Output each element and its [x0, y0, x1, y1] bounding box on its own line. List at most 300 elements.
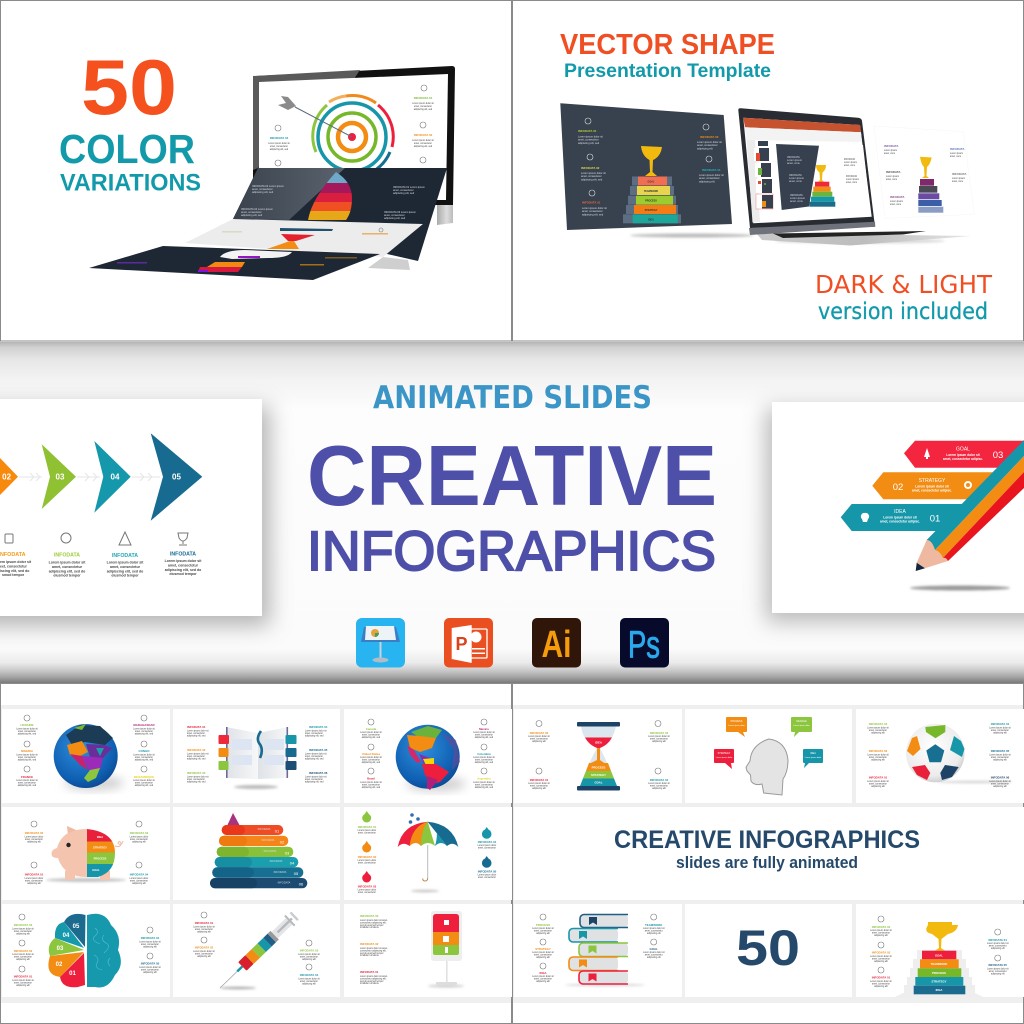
text blocks: INFODATA 02 [195, 946, 214, 950]
light trophy slide: Lorem ipsum [890, 201, 903, 203]
dark slide with teardrop: INFODATA 01 Lorem ipsum [393, 186, 425, 189]
laptop mockup: Lorem ipsum [846, 178, 859, 181]
laptop mockup: INFODATA [790, 194, 803, 197]
text blocks: Lorem ipsum dolor sit [987, 968, 1009, 970]
info column 04: INFODATA [112, 553, 138, 559]
info column 02: smod tempor [2, 573, 25, 577]
laptop base [756, 233, 971, 246]
central band background [0, 342, 1024, 683]
text blocks: adipiscing elit [647, 932, 661, 935]
text blocks: Lorem ipsum dolor sit amet, [360, 976, 388, 978]
card: open book [173, 709, 340, 803]
laptop mockup: INFODATA [787, 156, 800, 159]
dark slide with teardrop: adipiscing elit, sed [393, 191, 415, 195]
card: syringe [173, 904, 340, 997]
ring rows [210, 825, 307, 888]
text blocks: amet, consectetur [475, 733, 493, 736]
card: america globe [344, 709, 512, 803]
info column 03: eiusmod tempor [53, 574, 81, 578]
text blocks: United States [362, 752, 381, 756]
light trophy slide [874, 126, 974, 218]
text blocks: INFODATA 01 [14, 974, 33, 978]
text blocks: INFODATA 04 [309, 725, 328, 729]
dark slide text: Lorem ipsum dolor sit [581, 172, 606, 175]
text blocks: adipiscing elit [652, 740, 666, 743]
info column 02: NFODATA [0, 552, 26, 558]
idea arrow: 01 [930, 514, 940, 524]
hourglass [577, 722, 620, 790]
colored steps: PROCESS [932, 971, 946, 975]
text blocks: Lorem ipsum dolor sit [648, 735, 670, 738]
text blocks: Lorem ipsum dolor sit [989, 754, 1011, 756]
text blocks: INFODATA 03 [650, 731, 669, 735]
text blocks: adipiscing elit [993, 731, 1007, 734]
text blocks: amet, consectetur [130, 838, 148, 841]
text blocks: adipiscing elit [143, 945, 157, 948]
text blocks: Mexico [479, 727, 489, 731]
light trophy slide: amet, cons [950, 155, 962, 158]
drops with text: amet, consectetur [358, 861, 376, 864]
dark slide with teardrop: amet, consectetur [384, 213, 405, 217]
text blocks: amet, consectetur [187, 778, 205, 781]
strategy arrow: STRATEGY [919, 478, 946, 484]
drops with text: INFODATA 03 [358, 884, 377, 888]
small steps [809, 182, 835, 207]
text blocks: INFODATA 03 [869, 722, 888, 726]
tabs [218, 735, 296, 770]
steps [623, 176, 681, 223]
light trophy slide: Lorem ipsum [952, 178, 965, 180]
chevron arrows: 05 [172, 472, 181, 482]
drops with text: INFODATA 02 [358, 855, 377, 859]
text blocks: adipiscing elit [993, 758, 1007, 761]
drops with text: INFODATA 01 [358, 825, 377, 829]
light trophy slide: amet, cons [890, 203, 902, 206]
text blocks: amet, consectetur [989, 970, 1007, 973]
pig [52, 826, 123, 880]
text blocks: amet, consectetur [872, 957, 890, 960]
card: hourglass [514, 709, 682, 803]
ring rows: INFODATA [262, 838, 275, 842]
panel: left arrows slide [0, 399, 270, 626]
text blocks: Lorem ipsum dolor sit [360, 731, 382, 734]
text blocks [870, 916, 1009, 988]
left brain segments: 04 [63, 933, 70, 939]
icon: powerpoint: P [455, 634, 468, 654]
goal arrow: GOAL [956, 446, 970, 452]
goal arrow: 03 [993, 450, 1003, 461]
text blocks: INFODATA 04 [650, 778, 669, 782]
text blocks: amet, consectetur [650, 784, 668, 787]
text blocks: INFODATA 04 [300, 973, 319, 977]
text blocks: amet, consectetur [530, 784, 548, 787]
steps: GOAL [648, 180, 655, 184]
pig: GOAL [92, 868, 100, 872]
text blocks: Lorem ipsum dolor sit [187, 776, 209, 778]
light trophy slide: INFODATA [890, 195, 905, 199]
text blocks: amet, consectetur [305, 732, 323, 735]
text blocks: Lorem ipsum dolor sit [16, 728, 38, 730]
text blocks: amet, consectetur [991, 782, 1009, 785]
text blocks: Lorem ipsum dolor sit [193, 950, 215, 953]
text blocks: adipiscing elit, sed [187, 734, 206, 737]
left brain segments: 01 [69, 971, 76, 977]
text blocks: incididunt ut labore [360, 982, 380, 985]
goal arrow: amet, consectetur adipisc. [943, 457, 983, 461]
light trophy slide: Lorem ipsum [950, 153, 963, 155]
text blocks: INFODATA 02 [530, 731, 549, 735]
text blocks: adipiscing elit [993, 785, 1007, 788]
text blocks [360, 914, 388, 985]
drops with text: INFODATA 04 [478, 840, 497, 844]
icon: photoshop: Ps [628, 624, 660, 666]
laptop mockup: INFODATA [789, 174, 802, 177]
text blocks: adipiscing elit [197, 930, 211, 933]
card: road sign [344, 904, 512, 997]
shadow under slides [630, 234, 754, 238]
laptop mockup: Lorem ipsum [787, 158, 802, 162]
text blocks: amet, consectetur [18, 730, 36, 733]
text blocks: adipiscing elit, sed [18, 732, 37, 735]
card: book stack [514, 904, 682, 997]
text blocks: Lorem ipsum dolor sit [16, 779, 38, 782]
colored steps: STRATEGY [931, 980, 947, 984]
text blocks: amet, consectetur [991, 756, 1009, 759]
text blocks: Canada [366, 727, 377, 731]
text blocks: Lorem ipsum dolor sit [989, 726, 1011, 730]
text blocks: INFODATA 04 [988, 938, 1007, 942]
dark slide on laptop [776, 144, 819, 210]
card: brain [2, 904, 170, 997]
dark slide with teardrop: adipiscing elit, sed [241, 213, 263, 217]
text blocks: adipiscing elit, sed [475, 786, 494, 789]
text blocks: INFODATA 03 [187, 771, 206, 775]
text blocks: amet, consectetur [475, 758, 493, 761]
text blocks [25, 821, 149, 885]
text blocks [12, 914, 161, 987]
pig: STRATEGY [93, 846, 107, 850]
text blocks: MOZAMBIQUE [134, 775, 154, 779]
text blocks: Lorem ipsum dolor sit [360, 781, 382, 784]
text blocks: consectetur adipiscing elit, [360, 921, 387, 924]
monitor text blocks: INFODATA 02 [414, 133, 433, 137]
text blocks: Lorem ipsum dolor sit [473, 731, 495, 734]
text blocks: adipiscing elit, sed [362, 786, 381, 789]
pig: IDEA [97, 835, 103, 839]
text blocks [187, 725, 328, 783]
text blocks: sed do eiusmod tempor [360, 952, 384, 955]
text blocks: Lorem ipsum dolor sit [12, 979, 34, 982]
text blocks: INFODATA 04 [141, 936, 160, 940]
strategy arrow: 02 [893, 482, 903, 493]
text blocks: amet, consectetur [869, 782, 887, 785]
text blocks: adipiscing elit, sed [135, 758, 154, 761]
text blocks: amet, consectetur [650, 737, 668, 740]
text blocks: STRATEGY [535, 947, 551, 951]
chevron arrows: 04 [111, 472, 120, 482]
ring rows: INFODATA [274, 870, 287, 874]
text blocks: INFODATA 06 [309, 771, 328, 775]
drops with text: Lorem ipsum dolor [358, 829, 377, 832]
text blocks: Lorem ipsum dolor sit [193, 926, 215, 928]
text blocks: amet, consectetur [989, 944, 1007, 947]
dark slide with teardrop: amet, consectetur [393, 188, 414, 192]
chevron arrows [0, 433, 202, 521]
ring rows: 02 [280, 840, 285, 844]
light trophy slide: amet, cons [886, 178, 898, 181]
text blocks: amet, consectetur [530, 737, 548, 740]
monitor text blocks [268, 85, 434, 166]
text blocks: amet, consectetur [362, 758, 380, 761]
info column 03: amet, consectetur [52, 565, 83, 569]
text blocks: INFODATA 01 [187, 725, 206, 729]
laptop mockup: Lorem ipsum [844, 161, 857, 164]
info column 05: eiusmod tempor [169, 572, 197, 576]
panel: right pencil slide [766, 402, 1024, 622]
text blocks: Lorem ipsum dolor [130, 836, 149, 838]
text blocks: INFODATA 03 [872, 925, 891, 929]
light stairs [893, 950, 985, 998]
syringe body [215, 910, 300, 993]
idea arrow [841, 504, 964, 531]
text blocks: amet, consectetur [195, 952, 213, 955]
text blocks: Lorem ipsum dolor sit [305, 730, 327, 732]
head silhouette [746, 739, 788, 795]
info column 04: amet, consectetur [110, 565, 141, 569]
text blocks: Lorem ipsum dolor sit [989, 780, 1011, 783]
text blocks: amet, consectetur [25, 879, 43, 882]
speech bubbles: IDEA [810, 752, 816, 755]
text blocks: amet, consectetur [14, 955, 32, 958]
text blocks: Lorem ipsum dolor [25, 877, 44, 880]
laptop mockup: INFODATA [846, 176, 857, 178]
text blocks: adipiscing elit [991, 947, 1005, 950]
card: soccer ball [856, 709, 1024, 803]
heading: variations: VARIATIONS [60, 170, 201, 196]
text blocks: Lorem ipsum dolor sit [643, 951, 665, 954]
text blocks: Lorem ipsum dolor sit [133, 754, 155, 756]
text blocks: amet, consectetur [872, 982, 890, 985]
drops with text: amet, consectetur [478, 876, 496, 879]
text blocks: amet, consectetur [25, 838, 43, 841]
text blocks: adipiscing elit [874, 985, 888, 988]
text blocks: INFODATA 02 [14, 949, 33, 953]
text blocks: adipiscing elit [536, 980, 550, 983]
dark slide text: amet, consectetur [697, 143, 718, 147]
text blocks: Lorem ipsum dolor sit [870, 980, 892, 983]
left brain segments: 02 [56, 962, 63, 968]
target chart on monitor [313, 96, 393, 172]
dark slide text: amet, consectetur [578, 138, 599, 142]
dark slide text: Lorem ipsum dolor sit [697, 141, 722, 144]
text blocks: Lorem ipsum dolor sit [139, 940, 161, 944]
icon: keynote [356, 618, 405, 668]
text blocks [532, 914, 665, 983]
text blocks: amet, consectetur [475, 783, 493, 786]
text blocks: Lorem ipsum dolor sit [528, 782, 550, 785]
dark slide with teardrop: INFODATA 04 Lorem ipsum [241, 208, 273, 211]
text blocks: adipiscing elit, sed [18, 758, 37, 761]
text blocks: Lorem ipsum dolor sit [532, 951, 554, 954]
text blocks: Lorem ipsum dolor sit [532, 927, 554, 930]
text blocks: Lorem ipsum dolor sit [16, 754, 38, 756]
text blocks: adipiscing elit [991, 972, 1005, 975]
text blocks: Lorem ipsum dolor sit [870, 955, 892, 958]
colored steps: TEAMWORK [931, 962, 947, 966]
idea arrow: amet, consectetur adipisc. [880, 519, 920, 523]
goal arrow: Lorem ipsum dolor sit [946, 453, 981, 457]
ball [906, 724, 965, 782]
monitor text blocks: Lorem ipsum dolor sit [412, 139, 434, 142]
hourglass: PROCESS [592, 766, 605, 770]
text blocks: INFODATA 03 [360, 914, 379, 918]
subtitle: animated slides: ANIMATED SLIDES [373, 380, 652, 416]
text blocks: Lorem ipsum dolor sit [528, 735, 550, 738]
ring rows: 01 [275, 828, 280, 834]
slide thumbnails [754, 141, 773, 209]
light trophy slide: Lorem ipsum [886, 176, 899, 178]
text blocks: Lorem ipsum dolor sit [870, 929, 892, 932]
text blocks: UKRAINE [20, 723, 34, 727]
text blocks: Lorem ipsum dolor sit amet, [360, 948, 388, 950]
ring rows: 03 [285, 850, 290, 856]
light trophy slide: INFODATA [886, 170, 901, 174]
strategy arrow: amet, consectetur adipisc. [912, 488, 952, 492]
text blocks: adipiscing elit, sed [305, 757, 324, 760]
strategy arrow: Lorem ipsum dolor sit [915, 484, 950, 488]
text blocks: Lorem ipsum dolor sit [473, 781, 495, 784]
text blocks: amet, consectetur [141, 943, 159, 946]
subheading: version included: version included [818, 299, 988, 325]
text blocks: adipiscing elit [532, 787, 546, 790]
sign [431, 911, 462, 985]
ring rows: INFODATA [258, 827, 271, 831]
strategy arrow [872, 472, 994, 499]
title: infographics: INFOGRAPHICS [307, 519, 716, 582]
text blocks: consectetur adipiscing elit, [360, 977, 387, 980]
globe [54, 724, 118, 788]
dark slide text: adipiscing elit, sed [581, 177, 603, 181]
monitor text blocks: Lorem ipsum dolor sit [412, 102, 434, 105]
text blocks: amet, consectetur [135, 756, 153, 759]
laptop mockup: Lorem ipsum [789, 176, 804, 180]
text blocks: adipiscing elit [647, 956, 661, 959]
text blocks: amet, consectetur [300, 955, 318, 958]
light trophy slide: amet, cons [952, 180, 964, 183]
laptop mockup: amet, cons [790, 199, 803, 203]
card: stacked rings pyramid [173, 807, 340, 900]
icon: photoshop [620, 618, 669, 668]
ring rows: INFODATA [278, 880, 291, 884]
icon: illustrator: Ai [542, 624, 572, 666]
text blocks: INFODATA 05 [988, 963, 1007, 967]
card: number 50: 50 [736, 920, 800, 976]
text blocks: amet, consectetur [300, 980, 318, 983]
monitor text blocks: adipiscing elit, sed [414, 108, 433, 111]
left brain segments [48, 914, 86, 987]
dark slide with teardrop: INFODATA 03 Lorem ipsum [384, 211, 416, 214]
text blocks: Lorem ipsum dolor sit [12, 953, 34, 956]
text blocks: PROCESS [536, 923, 550, 927]
text blocks: adipiscing elit, sed [475, 761, 494, 764]
dark slide text: Lorem ipsum dolor sit [699, 174, 724, 177]
dark slide with teardrop: amet, consectetur [252, 187, 273, 191]
card: umbrella [344, 807, 512, 900]
text blocks: amet, consectetur [14, 981, 32, 984]
text blocks: adipiscing elit, sed [362, 761, 381, 764]
steps: TEAMWORK [644, 190, 658, 193]
text blocks: adipiscing elit, sed [187, 757, 206, 760]
text blocks: adipiscing elit [532, 740, 546, 743]
text blocks: amet, consectetur [195, 928, 213, 931]
text blocks: amet, consectetur [645, 929, 663, 932]
chevron arrows: 03 [56, 472, 65, 482]
globe [396, 725, 460, 790]
left brain segments: 05 [73, 924, 80, 930]
dark slide with teardrop: INFODATA 02 Lorem ipsum [252, 185, 284, 188]
text blocks [867, 722, 1011, 788]
text blocks: INFODATA 02 [25, 831, 44, 835]
info column 05 [165, 533, 202, 576]
ring rows: 05 [294, 871, 299, 876]
text blocks: INFODATA 01 [872, 976, 891, 980]
text blocks: sed do eiusmod tempor [360, 924, 384, 927]
text blocks [193, 912, 320, 985]
text blocks: adipiscing elit [536, 932, 550, 935]
info column 04: adipiscing elit, sed do [107, 569, 143, 573]
light trophy slide: INFODATA [950, 147, 965, 151]
ring rows: INFODATA [264, 849, 277, 853]
text blocks: INFODATA 05 [309, 748, 328, 752]
text blocks: amet, consectetur [534, 953, 552, 956]
text blocks [360, 719, 495, 789]
laptop mockup: amet, cons [789, 179, 802, 183]
text blocks: Lorem ipsum dolor sit [298, 978, 320, 980]
text blocks: amet, consectetur [362, 783, 380, 786]
text blocks: amet, consectetur [14, 930, 32, 933]
text blocks: Lorem ipsum dolor [25, 836, 44, 838]
drops with text: INFODATA 05 [478, 870, 497, 874]
dark slide text: adipiscing elit, sed [578, 141, 600, 145]
text blocks: Lorem ipsum dolor sit [867, 780, 889, 783]
text blocks: Lorem ipsum dolor sit [12, 928, 34, 930]
text blocks: amet, consectetur [645, 953, 663, 956]
hourglass: GOAL [594, 780, 603, 784]
panel: bottom right gallery [512, 683, 1024, 1024]
book [226, 727, 288, 779]
dark slide text: INFODATA 04 [702, 168, 721, 172]
text blocks: INFODATA 02 [360, 942, 379, 946]
heading: 50: 50 [81, 43, 177, 131]
info column 03: adipiscing elit, sed do [49, 569, 85, 573]
dark slide text: INFODATA 01 [582, 200, 601, 204]
text blocks: Lorem ipsum dolor sit [867, 726, 889, 730]
text blocks: Lorem ipsum dolor sit [648, 782, 670, 785]
monitor text blocks: amet, consectetur [414, 105, 432, 108]
text blocks: INFODATA 04 [991, 722, 1010, 726]
text blocks: adipiscing elit [874, 960, 888, 963]
text blocks: INFODATA 06 [991, 776, 1010, 780]
text blocks: Lorem ipsum dolor sit [139, 966, 161, 969]
idea arrow: Lorem ipsum dolor sit [883, 516, 918, 520]
monitor mockup [253, 66, 455, 225]
info column 02 [0, 534, 32, 577]
text blocks: adipiscing elit [652, 787, 666, 790]
info column 03 [49, 533, 86, 578]
text blocks: INFODATA 01 [195, 921, 214, 925]
text blocks: IDEA [540, 971, 547, 975]
small trophy [816, 165, 826, 182]
